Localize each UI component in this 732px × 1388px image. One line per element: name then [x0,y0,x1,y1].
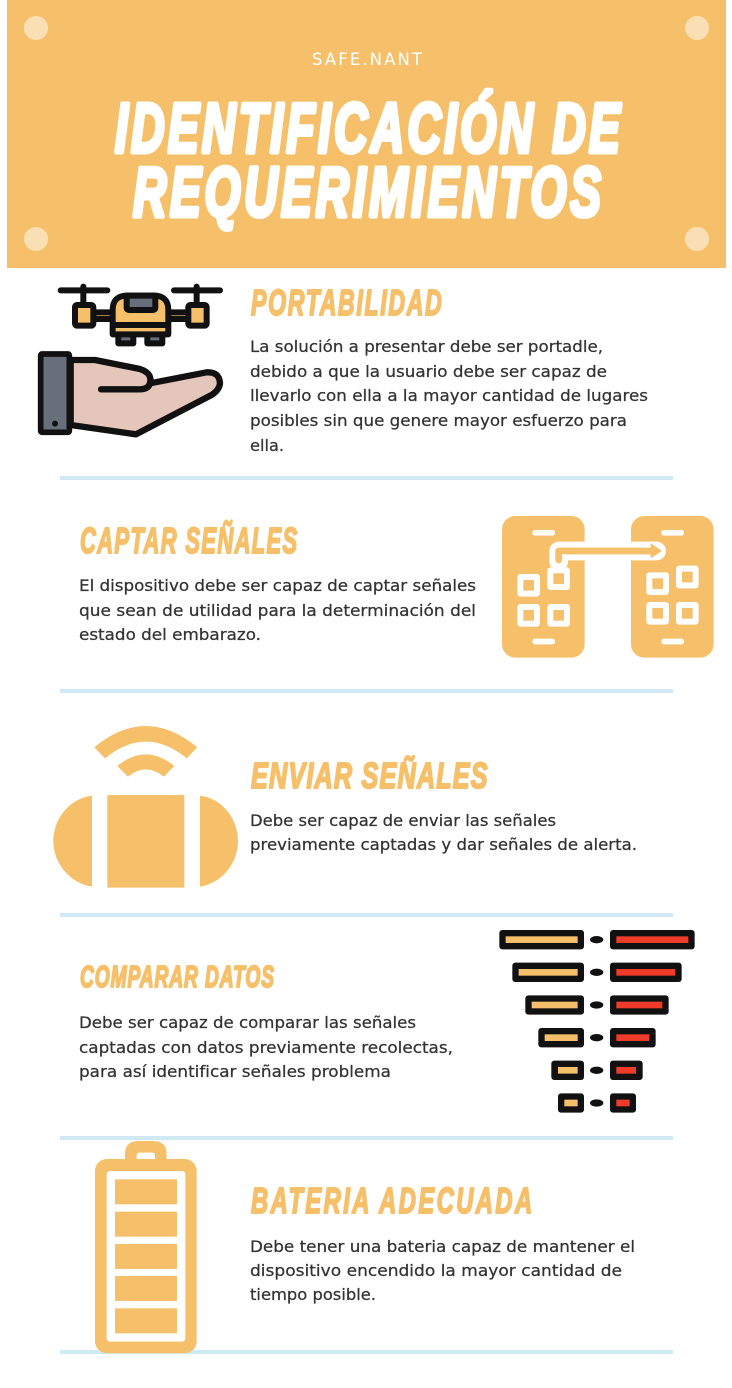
icon: battery [95,1141,197,1353]
text: captar señales: El dispositivo debe ser capaz de captar señales [79,576,476,595]
text: bateria adecuada: tiempo posible. [250,1285,376,1304]
heading: comparar datos: COMPARAR DATOS [80,961,274,994]
title [115,88,622,231]
heading: bateria adecuada: BATERIA ADECUADA [251,1181,532,1221]
text: portabilidad: llevarlo con ella a la mayor cantidad de lugares [250,386,648,405]
heading: portabilidad: PORTABILIDAD [251,284,442,323]
text: portabilidad: debido a que la usuario debe ser capaz de [250,362,607,381]
header panel [7,0,726,268]
text: portabilidad [250,337,648,455]
icon: two phones with arrow [502,516,714,658]
text: enviar señales: Debe ser capaz de enviar las señales [250,811,556,830]
text: enviar señales: previamente captadas y dar señales de alerta. [250,835,637,854]
icon: wireless device [53,726,238,888]
brand label: SAFE.NANT [312,50,423,69]
icon: comparison bars [499,930,695,1113]
text: bateria adecuada: dispositivo encendido la mayor cantidad de [250,1261,622,1280]
text: portabilidad: posibles sin que genere mayor esfuerzo para [250,411,627,430]
heading: enviar señales: ENVIAR SEÑALES [251,756,488,796]
text: comparar datos: para así identificar señales problema [79,1062,391,1081]
text: bateria adecuada [250,1237,635,1304]
text: captar señales: estado del embarazo. [79,625,261,644]
text: comparar datos [79,1013,453,1081]
text: portabilidad: ella. [250,436,284,455]
text: comparar datos: captadas con datos previamente recolectas, [79,1038,453,1057]
text: comparar datos: Debe ser capaz de comparar las señales [79,1013,416,1032]
heading: captar señales: CAPTAR SEÑALES [80,520,297,561]
text: captar señales: que sean de utilidad para la determinación del [79,601,476,620]
icon: drone over hand [41,287,220,434]
title: IDENTIFICACIÓN DE [115,88,622,167]
text: enviar señales [250,811,637,854]
text: portabilidad: La solución a presentar debe ser portadle, [250,337,603,356]
title: REQUERIMIENTOS [133,152,601,231]
text: captar señales [79,576,476,644]
text: bateria adecuada: Debe tener una bateria capaz de mantener el [250,1237,635,1256]
